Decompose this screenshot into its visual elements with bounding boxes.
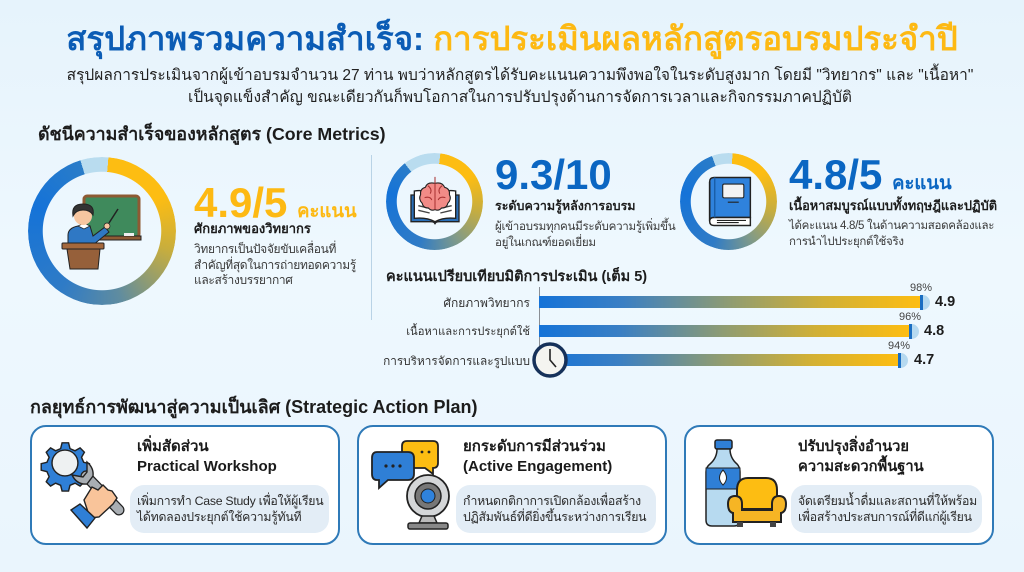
bar cap 2: [909, 324, 919, 339]
icon: chat and webcam: [371, 440, 450, 530]
bar percent 1: 98%: [910, 282, 932, 294]
heading: action plan: กลยุทธ์การพัฒนาสู่ความเป็นเลิศ (Strategic Action Plan): [30, 397, 478, 417]
metric description: knowledge: [495, 218, 676, 249]
card title: ยกระดับการมีส่วนร่วม: [463, 438, 606, 455]
card title: ความสะดวกพื้นฐาน: [798, 459, 924, 475]
donut: trainer score: [28, 157, 176, 305]
metric: 4.8/5: 4.8/5 คะแนน: [789, 151, 952, 198]
card text: กำหนดกติกาการเปิดกล้องเพื่อสร้าง: [463, 494, 641, 508]
metric label: trainer: ศักยภาพของวิทยากร: [194, 221, 311, 236]
card title: [798, 436, 924, 476]
icon: trainer at blackboard: [62, 194, 142, 270]
bar 1: [539, 296, 920, 308]
panel: trainer metric: [28, 157, 357, 305]
bar label 3: การบริหารจัดการและรูปแบบ: [383, 354, 530, 368]
icon: water bottle and armchair: [705, 439, 787, 527]
panel: knowledge metric: [386, 151, 676, 250]
card text: เพื่อสร้างประสบการณ์ที่ดีแก่ผู้เรียน: [798, 510, 972, 524]
metric: 9.3/10: 9.3/10: [495, 151, 612, 198]
card text: จัดเตรียมน้ำดื่มและสถานที่ให้พร้อม: [798, 494, 977, 508]
panel: active engagement: [357, 425, 667, 545]
intro text: สรุปผลการประเมินจากผู้เข้าอบรมจำนวน 27 ท่าน พบว่าหลักสูตรได้รับคะแนนความพึงพอใจในระดับสูงมาก โดยมี "วิทยากร" และ "เนื้อหา": [67, 67, 973, 84]
icon: blue book: [708, 176, 752, 226]
title: สรุปภาพรวมความสำเร็จ: การประเมินผลหลักสูตรอบรมประจำปี: [66, 20, 958, 57]
donut: content score: [680, 153, 777, 250]
icon: gear and wrench: [40, 442, 124, 530]
metric description: trainer: วิทยากรเป็นปัจจัยขับเคลื่อนที่: [194, 242, 336, 256]
bar chart: [383, 282, 955, 378]
metric description: knowledge: อยู่ในเกณฑ์ยอดเยี่ยม: [495, 236, 596, 248]
card title: เพิ่มสัดส่วน: [137, 438, 209, 455]
card text: ได้ทดลองประยุกต์ใช้ความรู้ทันที: [137, 510, 301, 524]
card text pill: [456, 485, 656, 533]
metric description: trainer: และสร้างบรรยากาศ: [194, 273, 293, 287]
intro text: เป็นจุดแข็งสำคัญ ขณะเดียวกันก็พบโอกาสในการปรับปรุงด้านการจัดการเวลาและกิจกรรมภาคปฏิบัติ: [188, 89, 852, 106]
card text: ปฏิสัมพันธ์ที่ดียิ่งขึ้นระหว่างการเรียน: [463, 510, 646, 524]
metric label: knowledge: ระดับความรู้หลังการอบรม: [495, 199, 636, 213]
icon: clock: [532, 342, 568, 378]
card text: เพิ่มการทำ Case Study เพื่อให้ผู้เรียน: [137, 494, 323, 508]
card text pill: [130, 485, 329, 533]
bar label 1: ศักยภาพวิทยากร: [443, 296, 530, 310]
card text: [136, 492, 324, 524]
card text: [798, 492, 977, 524]
card text: [463, 492, 646, 524]
metric label: content: เนื้อหาสมบูรณ์แบบทั้งทฤษฎีและปฏิบัติ: [789, 198, 997, 213]
bar cap 3: [898, 353, 908, 368]
card title: ปรับปรุงสิ่งอำนวย: [798, 439, 909, 455]
metric description: content: การนำไปประยุกต์ใช้จริง: [789, 236, 904, 248]
metric description: trainer: สำคัญที่สุดในการถ่ายทอดความรู้: [194, 258, 356, 272]
metric: 4.9/5: 4.9/5 คะแนน: [194, 179, 357, 226]
donut: knowledge score: [386, 153, 483, 250]
bar label 2: เนื้อหาและการประยุกต์ใช้: [406, 326, 530, 338]
bar 3: [539, 354, 898, 366]
card text pill: [791, 485, 982, 533]
icon: brain and book: [410, 176, 460, 224]
metric description: content: ได้คะแนน 4.8/5 ในด้านความสอดคล้องและ: [789, 220, 994, 232]
metric description: trainer: [194, 240, 356, 287]
intro text: [67, 64, 973, 106]
card title: [463, 438, 612, 475]
metric description: content: [788, 218, 994, 248]
bar 2: [539, 325, 909, 337]
card title: [137, 435, 277, 475]
bar value 2: 4.8: [924, 323, 944, 339]
bar value 1: 4.9: [935, 294, 955, 310]
panel: basic facilities: [684, 425, 994, 545]
bar percent 3: 94%: [888, 340, 910, 352]
heading: core metrics: ดัชนีความสำเร็จของหลักสูตร (Core Metrics): [38, 124, 386, 144]
panel: practical workshop: [30, 425, 340, 545]
bar cap 1: [920, 295, 930, 310]
panel: content metric: [680, 151, 997, 250]
card title: Practical Workshop: [137, 458, 277, 475]
metric description: knowledge: ผู้เข้าอบรมทุกคนมีระดับความรู้เพิ่มขึ้น: [495, 220, 675, 233]
bar percent 2: 96%: [899, 311, 921, 323]
bar value 3: 4.7: [914, 352, 934, 368]
heading: bar chart: คะแนนเปรียบเทียบมิติการประเมิน (เต็ม 5): [386, 269, 647, 285]
card title: (Active Engagement): [463, 458, 612, 475]
